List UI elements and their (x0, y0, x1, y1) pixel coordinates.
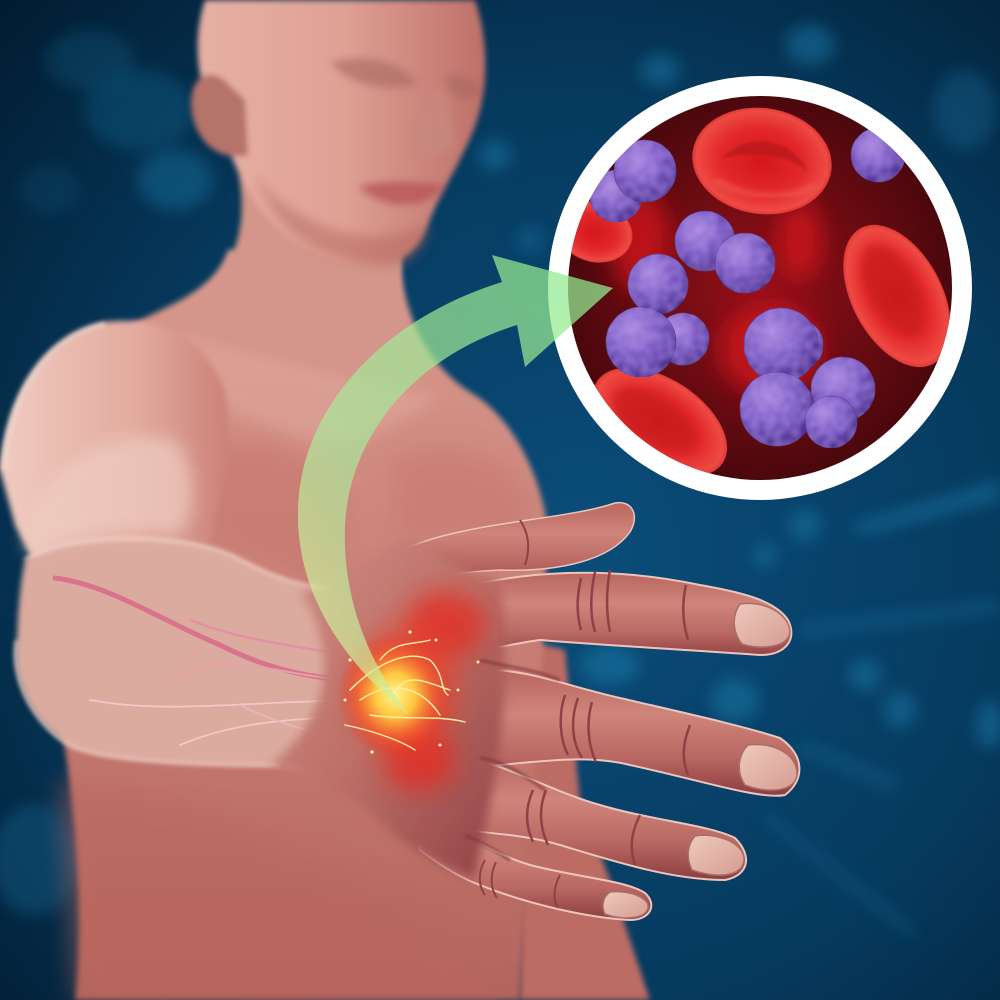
jaw shading (255, 175, 429, 266)
biceps highlight (25, 437, 193, 555)
head (198, 0, 485, 266)
nail (688, 835, 744, 875)
little finger (420, 815, 651, 920)
upper arm (0, 321, 228, 575)
white lens ring (548, 76, 972, 500)
shoulder rim light (3, 324, 105, 470)
mouth (358, 181, 445, 205)
forearm (16, 539, 395, 790)
purple bacteria cluster (590, 128, 905, 448)
nail (734, 603, 790, 647)
red blood cell right (843, 224, 950, 368)
thumb (385, 503, 634, 590)
neck (160, 170, 420, 395)
red blood cell top centre (692, 108, 832, 214)
figure: head and neck (160, 0, 485, 395)
figure: outstretched arm (0, 321, 395, 790)
inflammation glow on the wrist (337, 591, 485, 792)
red blood cell left (571, 201, 632, 263)
hand (270, 503, 799, 920)
index finger (420, 570, 791, 660)
magnified blood view (548, 76, 973, 500)
nerves and blood vessels in forearm (55, 578, 400, 745)
blood background (568, 96, 952, 480)
webbing creases between fingers (465, 660, 560, 860)
figure: torso (60, 250, 548, 1000)
green curved arrow from wrist to lens (298, 255, 613, 716)
nose (411, 90, 455, 156)
forearm outline (16, 539, 345, 765)
nail (603, 892, 648, 918)
red blood cell bottom (594, 368, 728, 474)
nail (739, 745, 797, 790)
ear (191, 75, 248, 156)
middle finger (420, 670, 799, 796)
figure: right arm behind the hand (520, 640, 650, 1000)
brow and eye shading (330, 58, 482, 99)
palm blended over the finger bases (270, 538, 505, 878)
ring finger (420, 757, 746, 880)
blurred red glow (610, 190, 822, 395)
